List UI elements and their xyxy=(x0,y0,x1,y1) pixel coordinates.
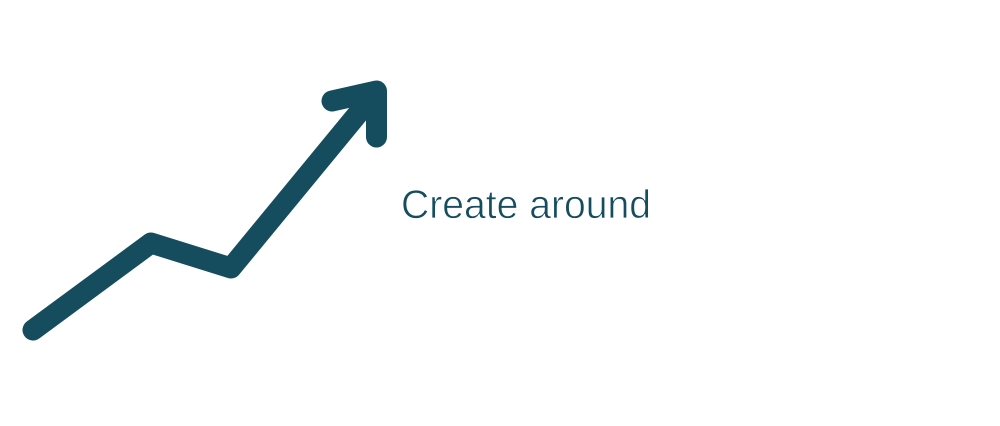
icon: rising arrow xyxy=(33,91,376,330)
arrow shaft xyxy=(33,93,375,330)
arrow head xyxy=(332,91,376,137)
text: Create around: Create around xyxy=(401,183,651,227)
